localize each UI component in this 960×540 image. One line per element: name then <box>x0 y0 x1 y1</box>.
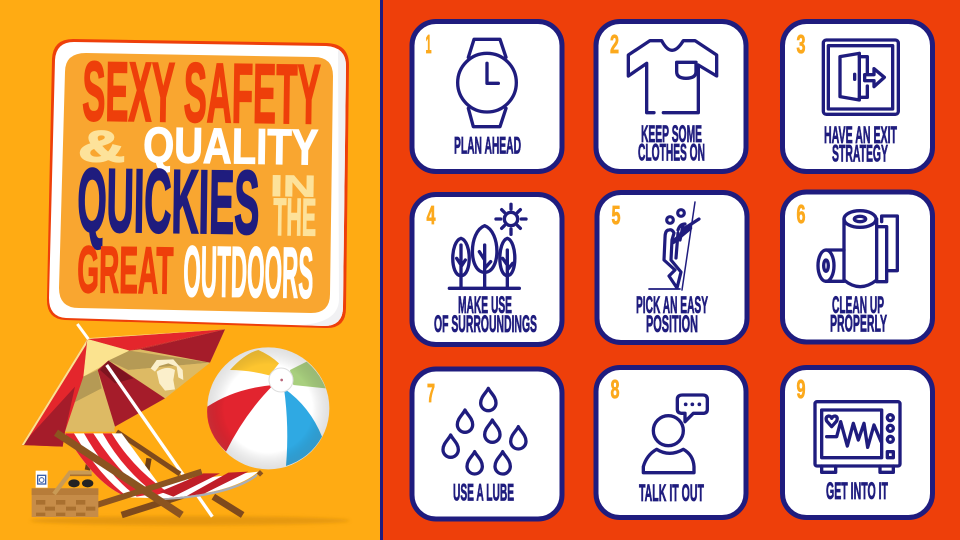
icon: watch <box>458 39 516 127</box>
card 6: clean up properly <box>782 192 932 342</box>
icon: person with speech bubble <box>643 395 707 473</box>
card 4: make use of surroundings <box>412 194 562 344</box>
card 9: get into it <box>782 368 932 518</box>
card frame <box>412 194 562 344</box>
text: SEXY SAFETY <box>82 44 321 141</box>
card 3: have an exit strategy <box>782 22 932 172</box>
title text: QUICKIES <box>77 151 260 254</box>
label <box>434 292 537 338</box>
title text: GREAT <box>77 232 174 307</box>
card frame <box>596 22 746 172</box>
label: POSITION <box>646 311 698 338</box>
fabric <box>65 433 258 498</box>
card frame <box>782 192 932 342</box>
number 2: 2 <box>610 29 619 59</box>
card 1: plan ahead: PLAN AHEAD <box>454 132 521 160</box>
panel: right background <box>381 0 960 540</box>
label: STRATEGY <box>832 140 888 168</box>
card 2: keep some clothes on: KEEP SOME <box>641 121 702 148</box>
card 6: clean up properly: CLEAN UP <box>832 292 884 319</box>
label: MAKE USE <box>458 292 512 319</box>
picnic basket <box>32 471 98 517</box>
number 8: 8 <box>610 374 620 404</box>
icon: trees and sun <box>449 204 526 288</box>
umbrella <box>22 329 225 447</box>
card frame <box>412 369 562 519</box>
number 4: 4 <box>426 200 436 230</box>
umbrella logo helmet <box>151 359 183 391</box>
deck chair <box>56 432 262 515</box>
divider line <box>380 0 383 540</box>
text: OUTDOORS <box>183 232 314 314</box>
icon: heart monitor <box>815 402 900 472</box>
title text: QUALITY <box>143 117 319 175</box>
card 7: use a lube <box>412 369 562 519</box>
number 9: 9 <box>796 374 806 404</box>
card 1: plan ahead: 1 <box>426 29 432 59</box>
title text: & <box>78 122 126 172</box>
ground shadow <box>30 516 350 525</box>
number 3: 3 <box>796 29 806 59</box>
card 2: keep some clothes on <box>596 22 746 172</box>
icon: paper rolls <box>818 211 897 287</box>
number 7: 7 <box>427 378 435 408</box>
card frame <box>596 368 746 518</box>
card 8: talk it out: TALK IT OUT <box>639 480 704 507</box>
icon: droplets <box>443 388 526 474</box>
card 1: plan ahead <box>412 22 562 172</box>
title sign <box>47 39 349 328</box>
title text: IN <box>270 170 316 204</box>
card frame <box>412 22 562 172</box>
card frame <box>597 192 747 342</box>
icon: climbing figures <box>649 202 699 290</box>
title text <box>77 44 321 314</box>
card 5: pick an easy position <box>597 192 747 342</box>
title sign: THE <box>273 188 317 248</box>
label <box>636 292 708 338</box>
number 5: 5 <box>612 200 620 230</box>
beach ball <box>207 347 329 469</box>
number 6: 6 <box>796 199 806 229</box>
label <box>824 122 897 168</box>
icon: exit door <box>823 40 898 114</box>
card 8: talk it out <box>596 368 746 518</box>
umbrella pole <box>77 324 212 517</box>
card 2: keep some clothes on: CLOTHES ON <box>638 140 705 166</box>
card 4: make use of surroundings: OF SURROUNDINGS <box>434 311 537 338</box>
card 7: use a lube: USE A LUBE <box>453 480 514 506</box>
card frame <box>782 22 932 172</box>
label <box>830 292 887 338</box>
card frame <box>782 368 932 518</box>
icon: t-shirt <box>628 41 717 113</box>
panel: left background <box>0 0 381 540</box>
card 5: pick an easy position: PICK AN EASY <box>636 292 708 319</box>
beach illustration <box>22 324 350 525</box>
label <box>638 121 705 166</box>
card 6: clean up properly: PROPERLY <box>830 310 887 338</box>
